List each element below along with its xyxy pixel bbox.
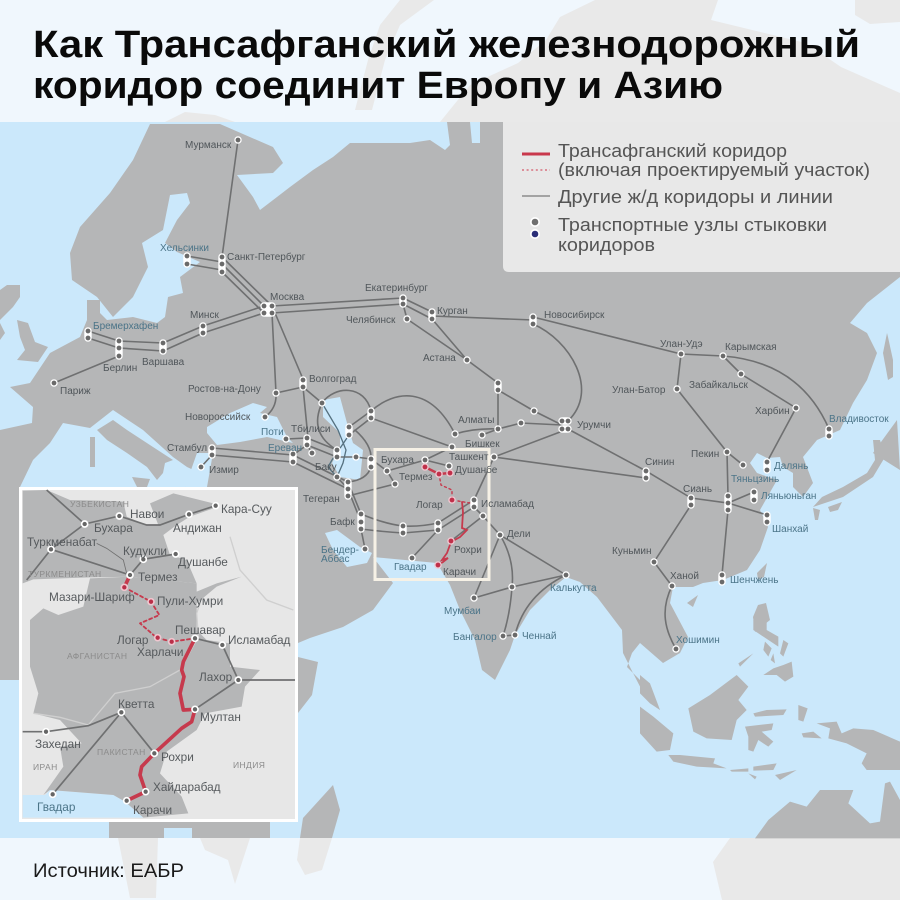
city labels on main map: Новосибирск bbox=[544, 309, 605, 321]
city labels on main map: Поти bbox=[261, 427, 284, 438]
city labels on main map: Бухара bbox=[381, 455, 414, 466]
inset country labels: ТУРКМЕНИСТАН bbox=[28, 569, 102, 579]
inset country labels: ПАКИСТАН bbox=[97, 747, 146, 757]
inset city labels: Харлачи bbox=[137, 645, 184, 659]
inset city labels: Хайдарабад bbox=[153, 780, 221, 794]
city labels on main map: Баку bbox=[315, 462, 337, 473]
city labels on main map: Владивосток bbox=[829, 414, 889, 425]
inset city labels: Пули-Хумри bbox=[157, 594, 223, 608]
city labels on main map: Новороссийск bbox=[185, 412, 251, 423]
city labels on main map: Тбилиси bbox=[291, 423, 330, 435]
inset city labels: Захедан bbox=[35, 737, 81, 751]
legend: transport hubs bbox=[530, 214, 827, 255]
inset railway lines bbox=[23, 490, 295, 794]
city labels on main map: Берлин bbox=[103, 363, 137, 374]
inset transport hubs bbox=[46, 506, 238, 801]
city labels on main map: Далянь bbox=[774, 461, 808, 472]
legend: transport hubs: Транспортные узлы стыковки bbox=[558, 214, 827, 235]
legend panel bbox=[503, 122, 900, 272]
city labels on main map: Курган bbox=[437, 306, 468, 317]
city labels on main map: Минск bbox=[190, 310, 219, 321]
city labels on main map: Челябинск bbox=[346, 314, 396, 326]
city labels on main map: Париж bbox=[60, 386, 91, 397]
city labels on main map: Урумчи bbox=[577, 420, 611, 431]
seas: Mediterranean, Black, Caspian, Persian Gulf bbox=[20, 397, 372, 567]
inset city labels: Кветта bbox=[118, 697, 155, 711]
inset city labels: Навои bbox=[130, 507, 164, 521]
legend: transport hubs: коридоров bbox=[558, 234, 655, 255]
city labels on main map: Сиань bbox=[683, 484, 712, 495]
city labels on main map: Дели bbox=[507, 529, 530, 540]
city labels on main map: Бремерхафен bbox=[93, 320, 158, 332]
inset country labels bbox=[28, 499, 265, 772]
legend: Trans-Afghan corridor: Трансафганский коридор bbox=[558, 140, 787, 161]
city labels on main map: Калькутта bbox=[550, 583, 597, 594]
legend: other railway lines: Другие ж/д коридоры и линии bbox=[558, 186, 833, 207]
city labels on main map: Ростов-на-Дону bbox=[188, 384, 261, 395]
city labels on main map: Мурманск bbox=[185, 140, 232, 151]
city labels on main map: Синин bbox=[645, 457, 674, 468]
city labels on main map: Душанбе bbox=[455, 464, 498, 476]
map panel: ocean and land bbox=[0, 122, 900, 838]
city labels on main map: Рохри bbox=[454, 545, 482, 556]
inset city labels: Мултан bbox=[200, 710, 241, 724]
inset map panel: Afghanistan and Pakistan bbox=[20, 488, 296, 820]
railway lines: other corridors bbox=[54, 140, 829, 649]
header faint land backdrop bbox=[165, 0, 900, 122]
inset city labels: Андижан bbox=[173, 521, 222, 535]
city labels on main map: Стамбул bbox=[167, 442, 207, 454]
inset Trans-Afghan corridor bbox=[124, 575, 195, 801]
city labels on main map: Варшава bbox=[142, 357, 185, 368]
inset highlight frame on main map bbox=[375, 450, 489, 580]
city labels on main map: Ханой bbox=[670, 571, 699, 582]
inset country labels: АФГАНИСТАН bbox=[67, 651, 127, 661]
city labels on main map: Логар bbox=[416, 500, 443, 511]
inset city labels: Пешавар bbox=[175, 623, 226, 637]
inset city labels: Туркменабат bbox=[27, 535, 98, 549]
legend: Trans-Afghan corridor bbox=[522, 140, 870, 180]
legend: Trans-Afghan corridor: (включая проектируемый участок) bbox=[558, 159, 870, 180]
city labels on main map: Аббас bbox=[321, 553, 349, 565]
city labels on main map: Измир bbox=[209, 465, 239, 476]
city labels on main map: Исламабад bbox=[481, 498, 534, 510]
city labels on main map: Бангалор bbox=[453, 632, 497, 643]
islands: Europe, Japan, Southeast Asia, Australia bbox=[0, 285, 900, 838]
inset country labels: УЗБЕКИСТАН bbox=[70, 499, 129, 509]
city labels on main map: Волгоград bbox=[309, 374, 357, 385]
city labels on main map: Шанхай bbox=[772, 524, 808, 535]
city labels on main map: Бендер- bbox=[321, 545, 359, 556]
city labels on main map: Санкт-Петербург bbox=[227, 251, 306, 263]
city labels on main map: Гвадар bbox=[394, 562, 427, 573]
inset country labels: ИНДИЯ bbox=[233, 760, 265, 770]
city labels on main map: Карымская bbox=[725, 342, 777, 353]
inset city labels: Карачи bbox=[133, 803, 172, 817]
inset city labels: Логар bbox=[117, 633, 149, 647]
inset city labels: Исламабад bbox=[228, 633, 291, 647]
inset city labels: Кара-Суу bbox=[221, 502, 272, 516]
city labels on main map: Хошимин bbox=[676, 635, 720, 646]
city labels on main map: Термез bbox=[399, 472, 433, 483]
city labels on main map: Ляньюньган bbox=[761, 491, 816, 502]
city labels on main map: Харбин bbox=[755, 405, 790, 417]
inset city labels: Кудукли bbox=[123, 544, 167, 558]
city labels on main map: Хельсинки bbox=[160, 243, 209, 254]
city labels on main map: Тяньцзинь bbox=[731, 474, 779, 485]
inset city labels: Термез bbox=[138, 570, 178, 584]
city labels on main map: Алматы bbox=[458, 415, 494, 426]
inset city labels: Рохри bbox=[161, 750, 194, 764]
inset country labels: ИРАН bbox=[33, 762, 58, 772]
inset city labels: Мазари-Шариф bbox=[49, 590, 135, 604]
inset city labels: Лахор bbox=[199, 670, 233, 684]
city labels on main map: Забайкальск bbox=[689, 379, 748, 391]
inset geography bbox=[23, 490, 295, 818]
city labels on main map: Ташкент bbox=[449, 452, 489, 463]
source note: Источник: ЕАБР bbox=[33, 861, 184, 882]
city labels on main map: Бишкек bbox=[465, 439, 500, 450]
land: Eurasia and Africa bbox=[0, 122, 900, 838]
city labels on main map: Куньмин bbox=[612, 546, 652, 557]
Trans-Afghan corridor on main map bbox=[425, 467, 470, 565]
city labels on main map: Карачи bbox=[443, 567, 476, 578]
city labels on main map: Улан-Удэ bbox=[660, 339, 703, 350]
city labels on main map: Пекин bbox=[691, 449, 719, 460]
city labels on main map: Астана bbox=[423, 353, 456, 364]
city labels on main map bbox=[60, 140, 889, 646]
city labels on main map: Ченнай bbox=[522, 631, 556, 642]
inset city labels bbox=[27, 502, 291, 817]
city labels on main map: Бафк bbox=[330, 516, 355, 528]
city labels on main map: Шенчжень bbox=[730, 575, 778, 586]
inset city labels: Душанбе bbox=[178, 555, 228, 569]
title: Как Трансафганский железнодорожный bbox=[33, 24, 860, 66]
city labels on main map: Улан-Батор bbox=[612, 385, 666, 396]
title: коридор соединит Европу и Азию bbox=[33, 65, 723, 107]
inset city labels: Бухара bbox=[94, 521, 133, 535]
city labels on main map: Мумбаи bbox=[444, 605, 481, 617]
city labels on main map: Москва bbox=[270, 292, 305, 303]
title bbox=[33, 24, 860, 107]
city labels on main map: Екатеринбург bbox=[365, 282, 428, 294]
city labels on main map: Тегеран bbox=[303, 494, 340, 505]
city labels on main map: Ереван bbox=[268, 443, 302, 454]
inset city labels: Гвадар bbox=[37, 800, 76, 814]
footer faint land backdrop bbox=[118, 838, 900, 900]
transport hubs on main map bbox=[54, 140, 829, 649]
